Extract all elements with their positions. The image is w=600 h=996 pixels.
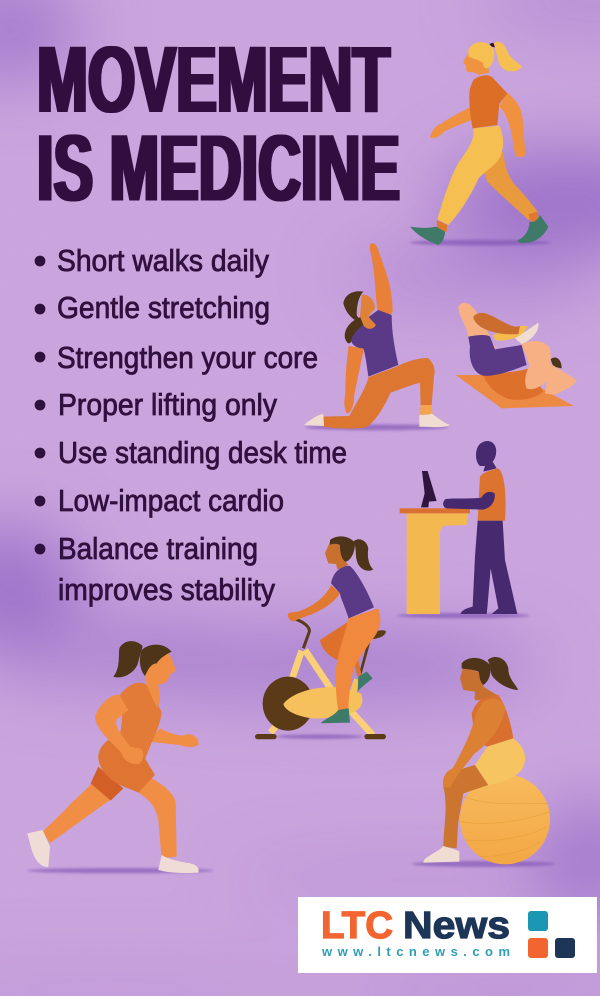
- bullet list: Short walks daily: [57, 243, 269, 278]
- bullet list: Strengthen your core: [57, 340, 318, 375]
- title: [37, 27, 400, 222]
- figure: jogging woman: [27, 641, 213, 873]
- figure: woman on balance ball: [412, 657, 555, 867]
- bullet list: Gentle stretching: [57, 290, 270, 325]
- logo: LTC News: [298, 897, 597, 973]
- figure: standing desk worker: [397, 441, 530, 618]
- logo: LTC News: www.ltcnews.com: [321, 944, 510, 959]
- bullet list: Low-impact cardio: [58, 483, 284, 518]
- bullet list: Use standing desk time: [58, 435, 347, 470]
- bullet list: [35, 243, 347, 607]
- figure: crunch on mat: [456, 303, 577, 408]
- logo: LTC News: LTC: [321, 905, 393, 947]
- bullet list: improves stability: [58, 572, 275, 607]
- title: MOVEMENT: [37, 27, 390, 133]
- figure: walking woman: [410, 42, 550, 246]
- figure: kneeling lunge stretch: [304, 243, 450, 430]
- bullet list: Balance training: [58, 531, 258, 566]
- figure: woman on exercise bike: [255, 536, 386, 739]
- bullet list: Proper lifting only: [58, 387, 277, 422]
- logo: LTC News: News: [403, 905, 510, 947]
